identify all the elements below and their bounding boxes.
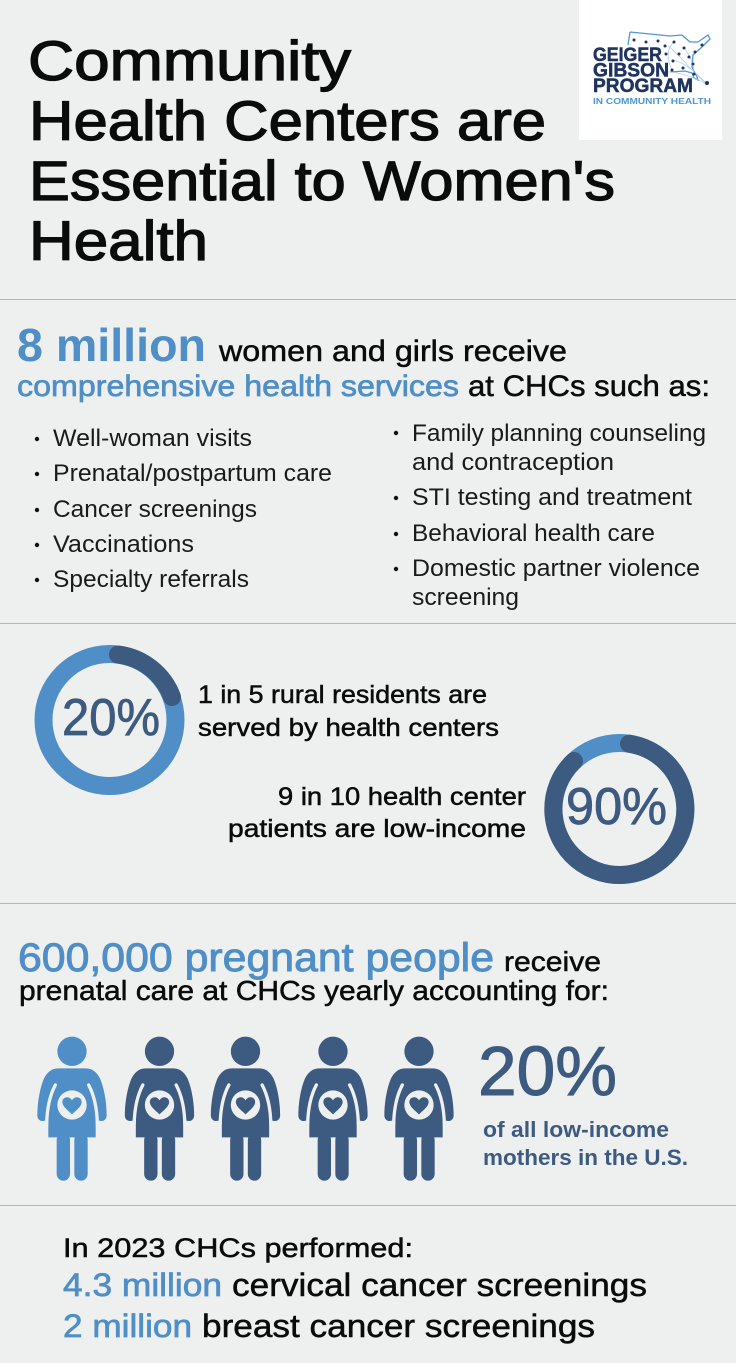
list: services left column <box>35 425 332 593</box>
donut chart: 20%: 20% <box>62 689 160 747</box>
donut chart: 20% <box>44 654 176 786</box>
title: Health Centers are <box>29 89 546 152</box>
logo: Geiger Gibson Program: PROGRAM <box>593 76 693 97</box>
list: services right column: Behavioral health care <box>412 520 655 547</box>
heading: 600,000 pregnant people: prenatal care at CHCs yearly accounting for: <box>19 975 609 1006</box>
icon: pregnant person 4 <box>298 1037 368 1181</box>
heading: 8 million women and girls: at CHCs such as: <box>468 370 710 403</box>
icon: pregnant person 3 <box>211 1037 280 1181</box>
list: services right column: screening <box>412 584 519 611</box>
text: 2023 screenings: 4.3 million <box>63 1267 222 1303</box>
stat: 20% of low-income mothers <box>478 1032 688 1170</box>
text: rural residents: 1 in 5 rural residents are <box>198 681 487 709</box>
list: services left column: Prenatal/postpartum care <box>53 460 332 487</box>
pictogram: five pregnant people <box>37 1037 454 1181</box>
logo: Geiger Gibson Program <box>579 0 722 140</box>
list: services left column: Cancer screenings <box>53 496 257 523</box>
stat: 20% of low-income mothers: mothers in the U.S. <box>483 1145 688 1170</box>
list: services left column: Vaccinations <box>53 531 194 558</box>
text: 2023 screenings: cervical cancer screenings <box>232 1267 647 1303</box>
heading: 600,000 pregnant people: 600,000 pregnant people <box>18 936 494 980</box>
list: services right column: STI testing and treatment <box>412 484 692 511</box>
text: 2023 screenings: breast cancer screenings <box>202 1308 595 1344</box>
heading: 8 million women and girls: women and girls receive <box>218 335 567 368</box>
list: services right column <box>394 420 706 611</box>
heading: 8 million women and girls: comprehensive health services <box>17 370 459 403</box>
heading: 600,000 pregnant people: receive <box>504 946 601 977</box>
list: services right column: and contraception <box>412 449 614 476</box>
text: low-income patients: patients are low-income <box>228 815 526 843</box>
title: Health <box>29 209 208 272</box>
donut chart: 90%: 90% <box>566 778 667 836</box>
icon: pregnant person 2 <box>125 1037 194 1181</box>
logo: Geiger Gibson Program: IN COMMUNITY HEALTH <box>593 96 711 106</box>
logo: Geiger Gibson Program: GEIGER <box>593 45 662 66</box>
heading: 600,000 pregnant people <box>18 936 609 1006</box>
text: 2023 screenings: 2 million <box>63 1308 192 1344</box>
donut chart: 90% <box>553 743 686 875</box>
title <box>28 29 615 272</box>
text: rural residents <box>198 681 499 742</box>
list: services right column: Family planning counseling <box>412 420 706 447</box>
icon: pregnant person highlighted <box>37 1037 107 1181</box>
stat: 20% of low-income mothers: of all low-income <box>483 1117 669 1142</box>
text: low-income patients <box>228 783 526 843</box>
text: 2023 screenings <box>63 1233 647 1344</box>
title: Essential to Women's <box>29 149 615 212</box>
text: rural residents: served by health centers <box>198 714 499 742</box>
heading: 8 million women and girls <box>17 319 710 403</box>
list: services right column: Domestic partner violence <box>412 555 700 582</box>
icon: pregnant person 5 <box>384 1037 454 1181</box>
list: services left column: Specialty referrals <box>53 566 249 593</box>
heading: 8 million women and girls: 8 million <box>17 319 206 371</box>
stat: 20% of low-income mothers: 20% <box>478 1032 617 1110</box>
text: low-income patients: 9 in 10 health center <box>278 783 526 811</box>
list: services left column: Well-woman visits <box>53 425 252 452</box>
title: Community <box>28 29 351 92</box>
text: 2023 screenings: In 2023 CHCs performed: <box>63 1233 413 1263</box>
logo: Geiger Gibson Program: GIBSON <box>593 60 669 82</box>
icon: US map network <box>628 32 710 85</box>
